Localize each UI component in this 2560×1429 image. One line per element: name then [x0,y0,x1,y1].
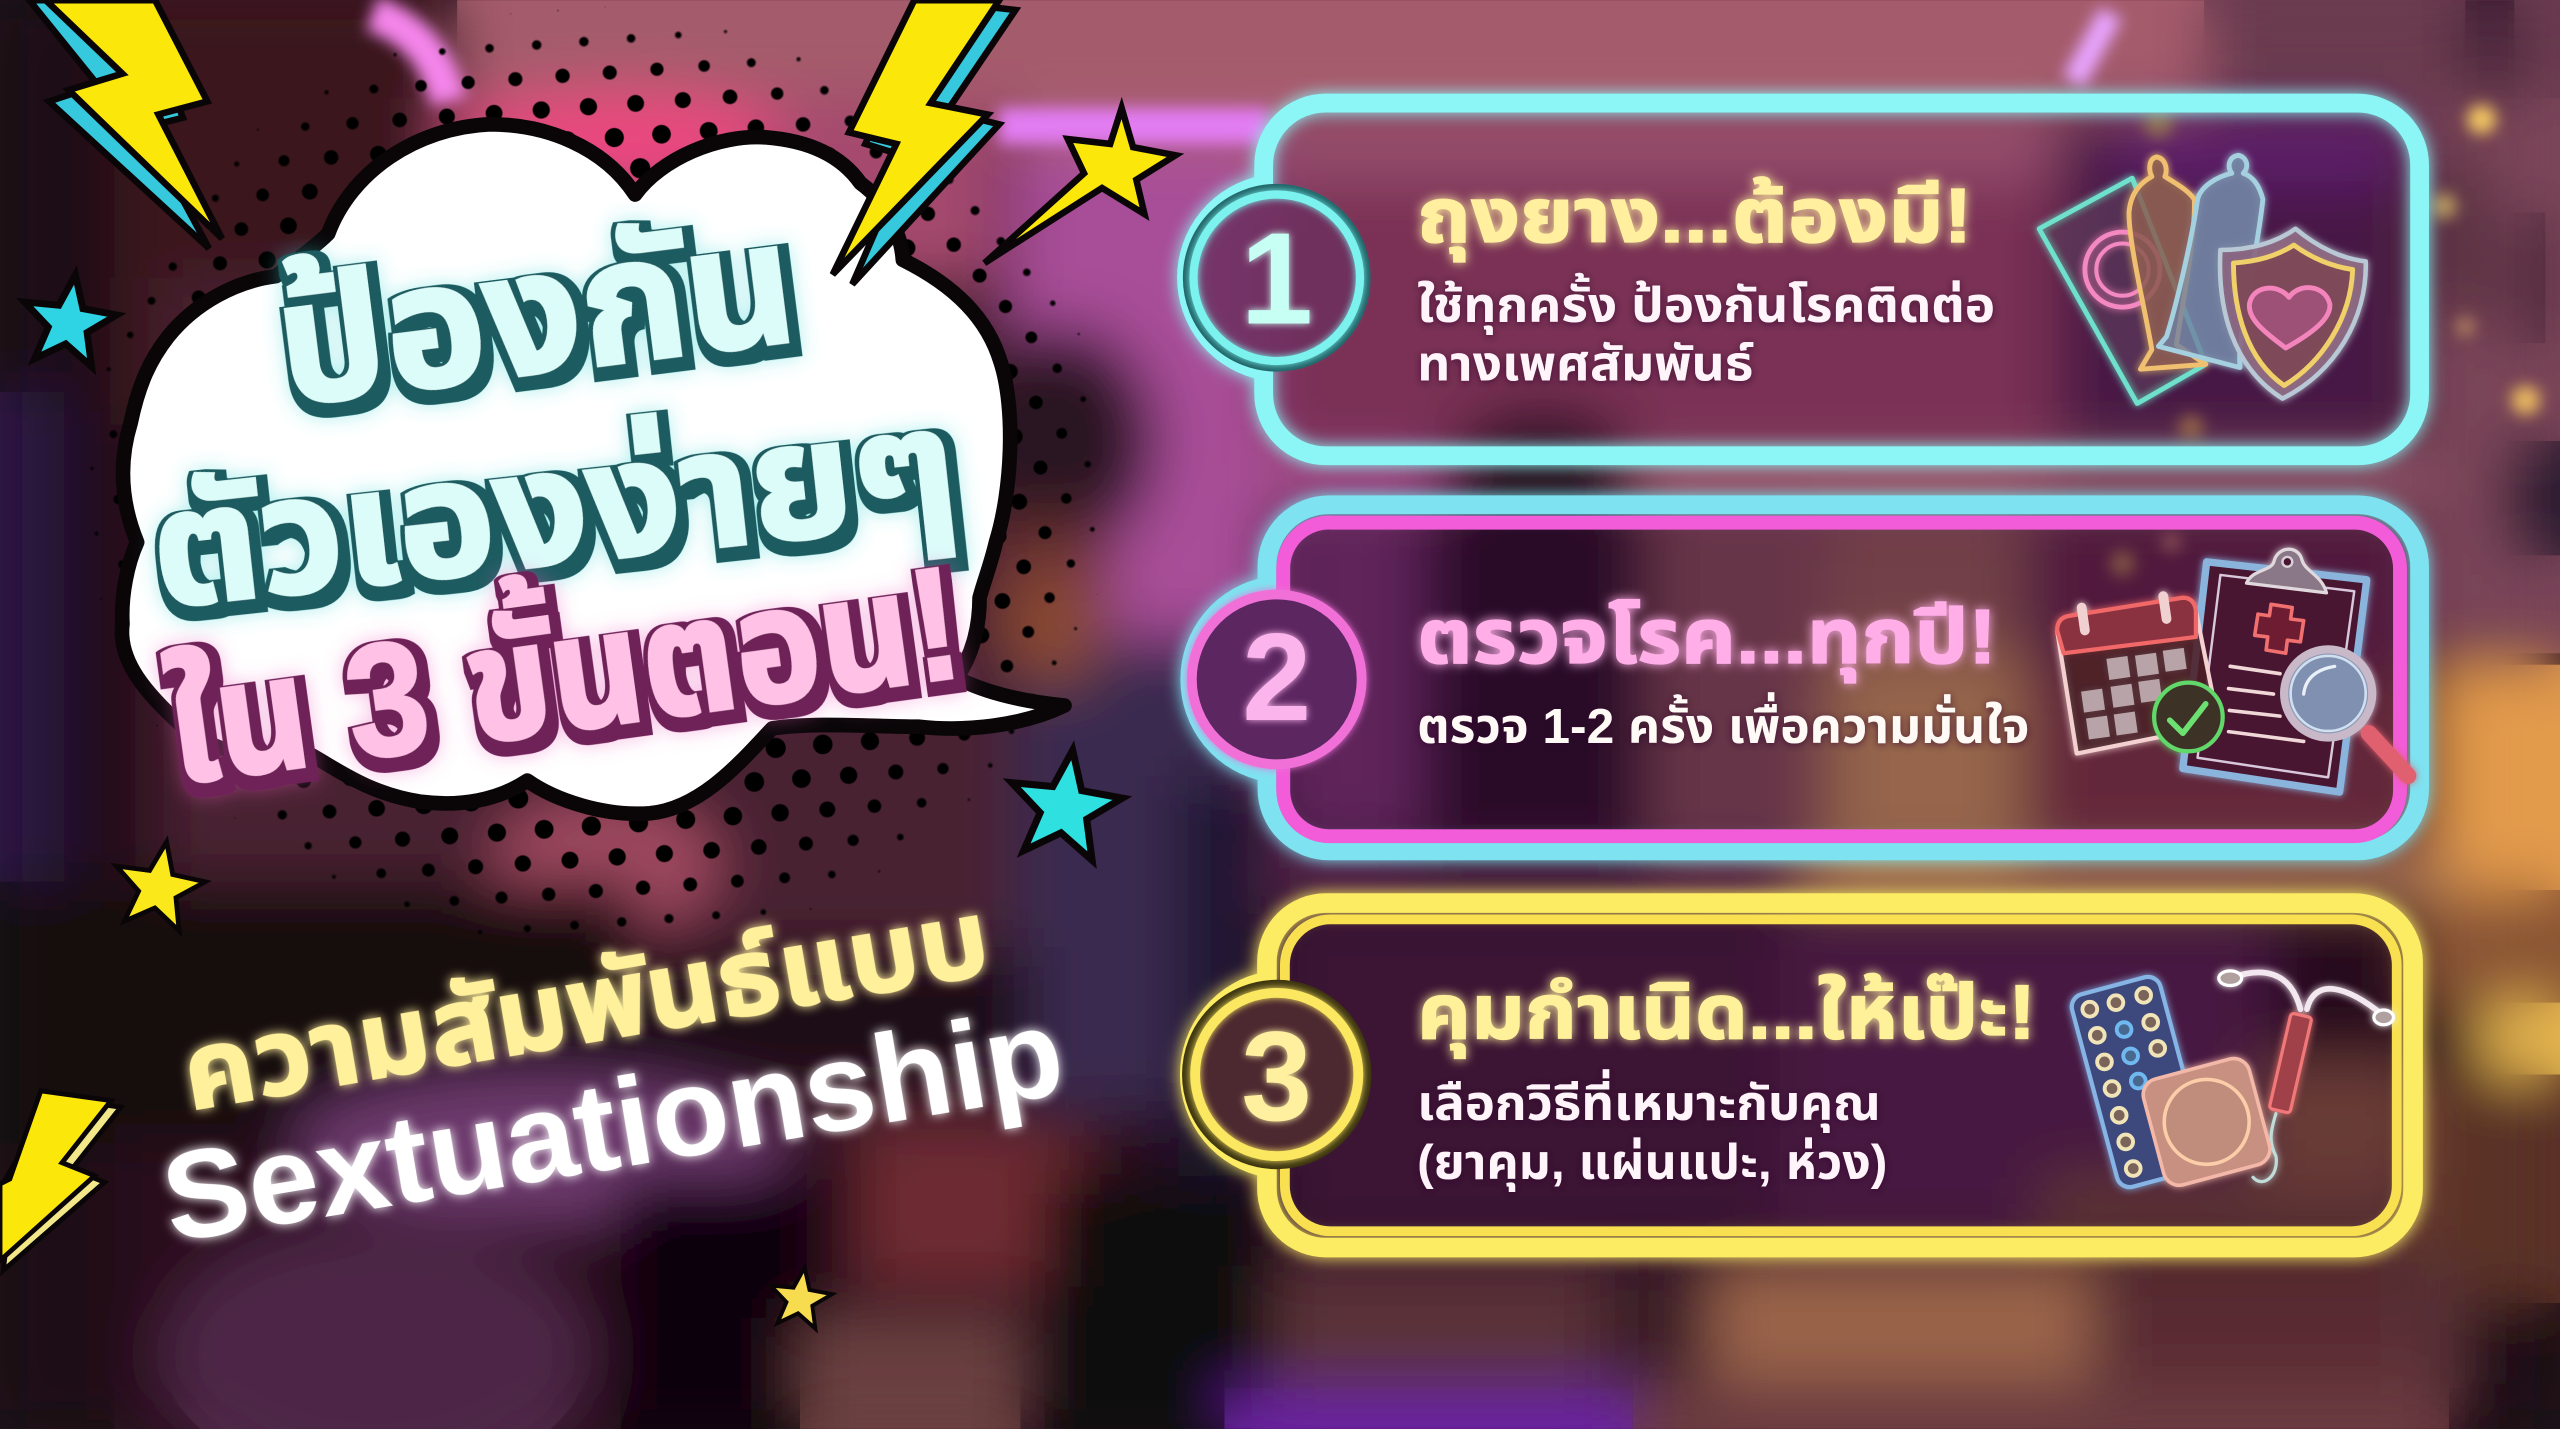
panel 1 number badge [1190,191,1363,364]
title: line 2: ตัวเองง่ายๆ [142,373,966,642]
panel 2 fill [1190,505,2420,851]
icon: lightning bolt bottom left [0,1091,121,1270]
panel 3 outer frame [1190,903,2413,1248]
icon: yellow star with tail [984,108,1176,263]
halftone dots behind the cloud [90,6,1114,954]
subtitle: Sextuationship: Sextuationship [153,980,1073,1269]
speech cloud [122,124,1064,814]
panel 2: yearly check-up [1190,505,2420,851]
panel 1 number badge: 1 [1240,205,1313,351]
panel 3 inner frame [1285,919,2397,1231]
panel 3 body text: เลือกวิธีที่เหมาะกับคุณ [1417,1069,1881,1133]
panel 1 frame [1186,103,2420,456]
panel 3 number badge: 3 [1241,1005,1312,1147]
panel 3: contraception [1189,903,2413,1248]
panel 3 number badge [1189,986,1365,1163]
panel 3 heading: คุมกำเนิด...ให้เป๊ะ! [1417,971,2036,1059]
panel 1: condoms [1186,103,2420,456]
subtitle: Thai line: ความสัมพันธ์แบบ [173,876,998,1133]
panel 1 body text: ทางเพศสัมพันธ์ [1417,338,1754,392]
neon ceiling strips and bokeh lights [372,13,2540,577]
panel 1 body text [1417,273,1995,392]
panel 2 number badge: 2 [1242,609,1311,747]
icon: small yellow star [766,1263,835,1330]
panel 1 fill [1186,103,2420,456]
icon: yellow star lower left [107,834,211,934]
panel 2 body text: ตรวจ 1-2 ครั้ง เพื่อความมั่นใจ [1417,692,2029,754]
panel 3 body text [1417,1069,1887,1192]
icon: pills, patch and IUD [2069,971,2393,1190]
panel 2 inner frame [1283,523,2400,836]
panel 2 heading: ตรวจโรค...ทุกปี! [1417,595,1997,683]
icon: condoms and shield [2039,155,2366,403]
panel 1 heading: ถุงยาง...ต้องมี! [1417,174,1972,262]
panel 3 body text: (ยาคุม, แผ่นแปะ, ห่วง) [1417,1136,1887,1192]
title: line 1: ป้องกัน [266,184,805,442]
icon: cyan star left [17,268,122,369]
icon: lightning bolt top left [29,0,222,248]
icon: cyan star right [1003,742,1128,863]
panel 1 body text: ใช้ทุกครั้ง ป้องกันโรคติดต่อ [1417,273,1995,335]
title: line 3: ใน 3 ขั้นตอน! [155,517,970,818]
panel 2 outer frame [1190,505,2420,851]
icon: lightning bolt top centre [833,0,1016,284]
panel 2 number badge [1192,594,1362,764]
icon: calendar, clipboard and magnifier [2057,549,2408,792]
panel 3 fill [1190,903,2413,1248]
